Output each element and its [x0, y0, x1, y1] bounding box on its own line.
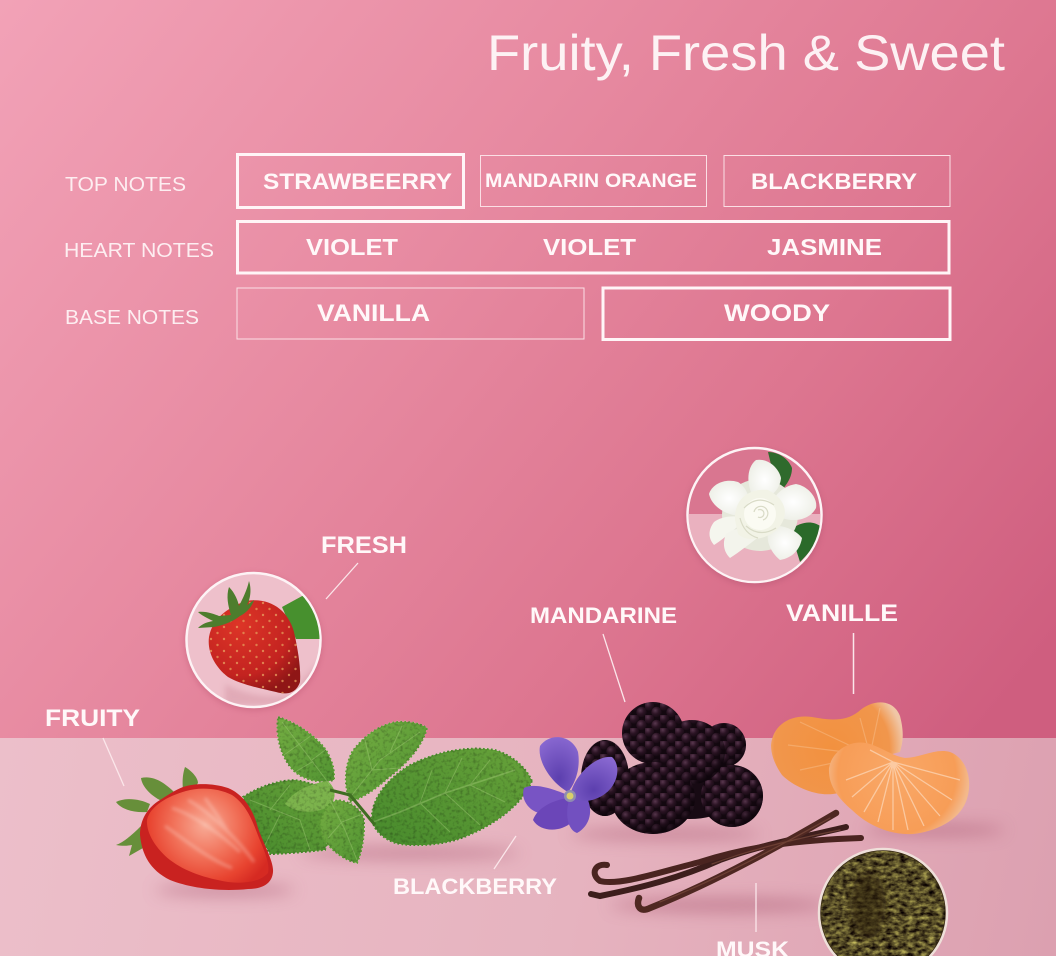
callout: blackberry — [393, 836, 557, 899]
mint leaf: upper left — [277, 717, 334, 782]
title: Fruity, Fresh & Sweet — [487, 25, 1005, 81]
mint veins — [250, 722, 515, 860]
callout: fresh: FRESH — [321, 532, 407, 559]
sepals — [116, 767, 198, 856]
vanilla pod two — [591, 827, 846, 896]
violet center — [564, 790, 576, 802]
berry front — [611, 762, 695, 834]
cast shadows on the table — [155, 824, 1005, 912]
mint stem — [330, 790, 375, 825]
circle inset: jasmine flower — [686, 448, 824, 586]
base note: woody: WOODY — [724, 300, 830, 327]
mint sprig — [243, 717, 532, 863]
berry back left — [581, 740, 629, 816]
tabletop surface — [0, 738, 1056, 956]
heart notes box — [238, 222, 949, 273]
mandarin segment lines — [846, 750, 960, 830]
berry top — [622, 702, 684, 764]
circle inset: strawberry — [184, 573, 322, 711]
vanilla pod highlights — [660, 818, 840, 902]
berry right — [701, 765, 763, 827]
mint leaf: front — [320, 800, 364, 863]
callout: mandarine: MANDARINE — [530, 603, 677, 628]
callout: vanille: VANILLE — [786, 600, 898, 627]
top note: blackberry — [724, 156, 950, 206]
cut strawberry — [116, 767, 273, 890]
mandarin segments — [771, 702, 969, 834]
vanilla pod one — [638, 813, 836, 910]
base note: vanilla: VANILLA — [317, 300, 430, 327]
violet eye — [566, 792, 574, 800]
mandarin back segment — [771, 702, 903, 794]
vanilla pods — [591, 813, 861, 910]
top note: strawberry — [238, 154, 464, 208]
top note: mandarin orange — [480, 156, 706, 206]
strawberry core streaks — [165, 798, 254, 868]
mandarin front segment — [829, 743, 969, 834]
violet lower petals — [523, 786, 570, 814]
top note: strawberry: STRAWBEERRY — [263, 169, 452, 194]
top note: blackberry: BLACKBERRY — [751, 169, 917, 194]
strawberry cut face — [147, 789, 268, 883]
notes table — [64, 154, 950, 340]
violet flower — [523, 737, 617, 833]
pink wall background — [0, 0, 1056, 740]
mint leaf: upper right — [346, 722, 427, 802]
callout: fruity: FRUITY — [45, 705, 140, 732]
vanilla pod three — [595, 838, 861, 882]
base note: woody — [603, 288, 950, 340]
base note: vanilla — [237, 288, 584, 339]
callout: musk — [716, 883, 790, 956]
violet right petal — [570, 757, 617, 801]
mint leaf: small center — [285, 781, 335, 812]
jasmine center rosette — [735, 490, 785, 539]
berry center — [659, 720, 725, 784]
jasmine petals — [709, 481, 750, 516]
row label: base notes: BASE NOTES — [65, 306, 199, 329]
strawberry body — [140, 784, 273, 890]
heart notes box: VIOLET — [306, 234, 398, 260]
callout: mandarine — [530, 603, 677, 702]
heart notes box: VIOLET — [543, 234, 636, 260]
berry cluster base — [635, 751, 745, 819]
mint leaf: left — [243, 780, 331, 854]
mint leaf: large right — [372, 749, 532, 845]
violet top petal — [540, 737, 579, 792]
row label: top notes: TOP NOTES — [65, 173, 186, 196]
callout: vanille — [786, 600, 898, 694]
callout: fresh — [321, 532, 407, 599]
circle inset: musk moss — [819, 849, 947, 956]
callout: fruity — [45, 705, 140, 786]
berry back right — [702, 723, 746, 767]
mandarin back segment lines — [788, 708, 880, 770]
top note: mandarin orange: MANDARIN ORANGE — [485, 170, 697, 192]
jasmine petal backing — [722, 479, 798, 551]
callout: blackberry: BLACKBERRY — [393, 874, 557, 899]
row label: heart notes: HEART NOTES — [64, 239, 214, 262]
blackberries — [581, 702, 763, 834]
heart notes box: JASMINE — [767, 234, 882, 260]
